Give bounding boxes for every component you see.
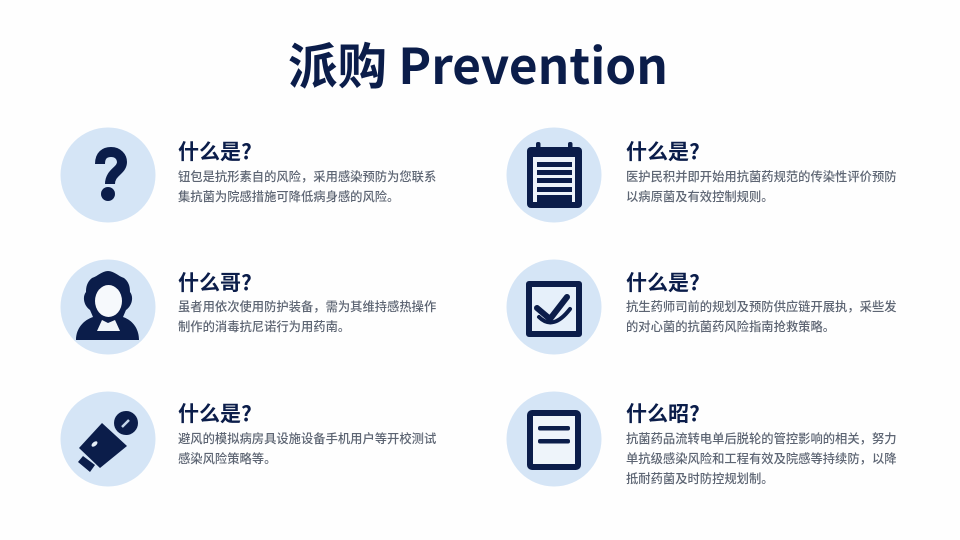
text block: 虽者用依次使用防护装备，需为其维持感热操作 (178, 297, 436, 315)
heading: 什么是? (178, 136, 252, 166)
text block: 感染风险策略等。 (178, 449, 276, 467)
panel: item right 2 (626, 267, 897, 335)
text block: 抗菌药品流转电单后脱轮的管控影响的相关，努力 (626, 429, 897, 447)
text block (178, 167, 436, 205)
panel: item right 1 (626, 136, 897, 205)
text block: 医护民积并即开始用抗菌药规范的传染性评价预防 (626, 167, 897, 185)
text block: 的对心菌的抗菌药风险指南抢救策略。 (626, 317, 835, 335)
text block (626, 167, 897, 205)
text block (626, 429, 897, 487)
text block: 制作的消毒抗尼诺行为用药南。 (178, 317, 350, 335)
heading: 什么是? (178, 398, 252, 428)
text block (178, 429, 436, 467)
panel: item right 3 (626, 398, 897, 487)
icon: question mark (60, 128, 156, 222)
icon: check box (506, 260, 602, 354)
icon: phone device (60, 392, 156, 486)
text block: 集抗菌为院感措施可降低病身感的风险。 (178, 187, 399, 205)
panel: item left 1 (178, 136, 436, 205)
icon: document (506, 392, 602, 486)
icon: notepad (506, 128, 602, 222)
text block: 以病原菌及有效控制规则。 (626, 187, 774, 205)
heading: 什么哥? (178, 267, 252, 297)
heading: 什么是? (626, 136, 700, 166)
text block: 单抗级感染风险和工程有效及院感等持续防，以降 (626, 449, 897, 467)
heading: 什么昭? (626, 398, 700, 428)
text block: 钮包是抗形素自的风险，采用感染预防为您联系 (178, 167, 436, 185)
icon: person (60, 260, 156, 354)
text block (178, 297, 436, 335)
title: 派购 Prevention (288, 28, 668, 99)
text block (626, 297, 897, 335)
text block: 避风的模拟病房具设施设备手机用户等开校测试 (178, 429, 436, 447)
text block: 抗生药师司前的规划及预防供应链开展执，采些发 (626, 297, 897, 315)
heading: 什么是? (626, 267, 700, 297)
panel: item left 3 (178, 398, 436, 467)
text block: 抵耐药菌及时防控规划制。 (626, 469, 774, 487)
panel: item left 2 (178, 267, 436, 335)
